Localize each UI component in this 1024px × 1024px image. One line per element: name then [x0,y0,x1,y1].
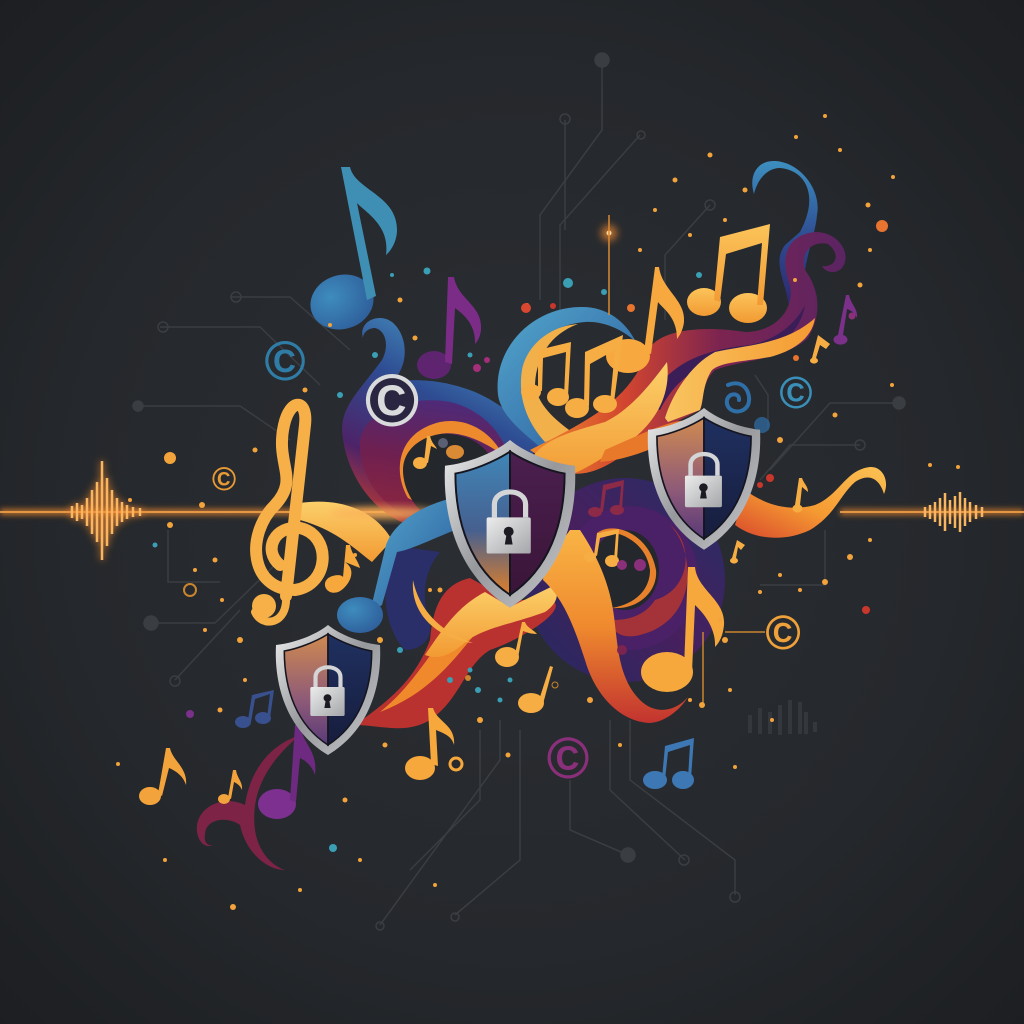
shield: left [276,625,380,755]
shield: right [648,408,760,550]
shield: large centre [445,440,575,608]
swirl icon right [727,383,749,411]
icon: beamed notes upper right [687,224,770,323]
ribbon: left wings [300,502,440,562]
ribbon: lower left flame [355,578,557,728]
ribbon: right wave [735,467,886,538]
icon: purple note [417,277,481,379]
copyright symbol: right orange [703,607,801,705]
icon: beamed notes center [521,335,623,418]
copyright symbol: blue left: © [264,329,306,392]
icon: small notes [139,295,857,819]
icon: note inside ring [413,436,464,469]
ribbon: upper right flame [530,161,846,480]
waveform: left [0,461,440,560]
padlock [487,492,531,554]
ribbon: blue loop [498,307,636,447]
ribbon: left ring with blue tail [342,318,540,525]
icon: treble clef [252,405,323,622]
ribbon: navy and purple spiral disk [525,478,725,682]
ribbon: lower right flame [543,530,688,723]
copyright symbol: right blue: © [779,367,813,418]
particles [116,114,960,910]
padlock [310,667,345,716]
copyright symbol: right orange: © [765,607,801,660]
copyright symbol: white: © [365,359,419,442]
copyright symbol: purple bottom: © [547,726,589,791]
icon: single note next to flame [606,267,684,373]
ribbon: lower left purple swirl [197,735,300,870]
icon: large orange note [641,567,724,692]
ribbon: blue note beam and navy [337,498,455,650]
copyright symbol: small orange: © [212,460,236,497]
padlock [685,454,722,507]
waveform: right [840,492,1024,532]
faint equalizer [750,700,815,735]
circuit lines [133,53,905,930]
spark of light [601,215,617,315]
icon: large blue note [303,167,397,338]
